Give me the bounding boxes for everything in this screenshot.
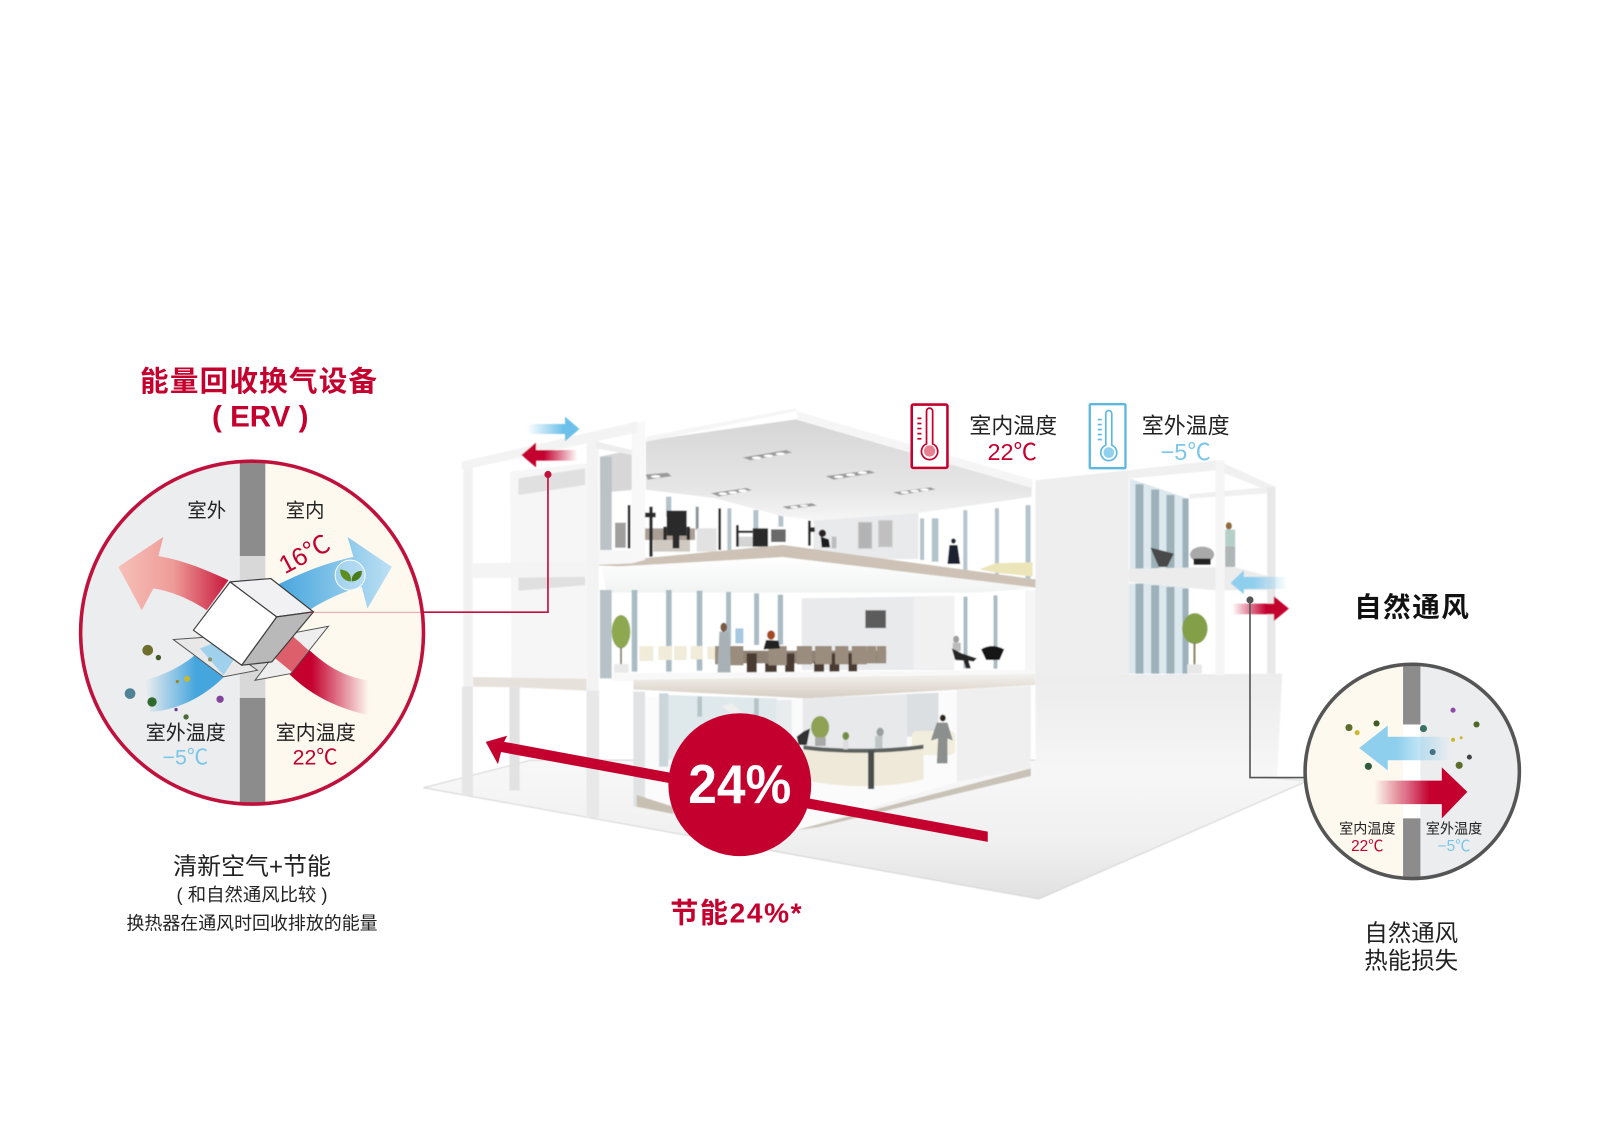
label: indoor temperature: 22℃ [1351,838,1383,855]
icon: leaf bubble [335,560,365,590]
left inner wall [510,463,587,678]
lower back wall [802,596,954,670]
lower floor background [600,593,1035,673]
label: outdoor temperature: −5℃ [1438,838,1470,855]
connector: ERV to building [306,471,551,612]
side beam [597,442,632,455]
text block: ERV benefit: 清新空气+节能 [173,853,331,880]
arrow: exhaust air to outdoor [118,537,228,610]
dust particles [125,645,224,720]
people in meeting room [717,623,780,673]
ground right wall [957,686,1031,782]
label: indoor temperature: 室内温度 [1339,821,1396,837]
title: ERV heading [140,366,378,434]
thermometer blue icon [1090,404,1125,468]
side interior ceiling [600,450,632,493]
badge: 24 percent [668,713,811,856]
side opening interior [600,450,632,550]
ceiling [646,419,1032,520]
lower glass columns [600,590,997,678]
building illustration [423,408,1308,899]
floor edge left [637,795,673,814]
balcony chairs [1150,547,1214,567]
ground wall right [907,693,938,737]
arrow: blue air in [527,417,579,441]
column rear [1267,487,1276,674]
lower floor slab face [633,674,1035,698]
right wing frame back [1129,460,1276,494]
legend: indoor temperature [969,414,1057,465]
ground glass [668,695,777,760]
circle outline [1305,664,1519,879]
ground back wall [803,694,907,750]
floor box [593,550,645,565]
label: indoor temperature: 室内温度 [276,722,356,745]
column front [1215,460,1224,675]
beam lower left [473,677,586,691]
column: inner [509,687,520,791]
title: ERV heading: ( ERV ) [212,401,308,434]
label: outdoor temperature: 室外温度 [1426,821,1482,837]
label: outdoor temperature: 室外温度 [146,722,226,745]
badge: 24 percent: 24% [688,753,791,815]
right white column [1025,590,1037,672]
seated person [819,530,836,548]
ground columns [633,692,792,807]
upper back wall [813,512,918,559]
upper glass columns [666,497,938,562]
text block: ERV benefit [126,853,378,934]
label: indoor temperature [1339,821,1396,855]
building right block [1035,460,1289,779]
arrow: red air out [521,443,577,467]
side glass [600,457,612,550]
label: outdoor: 室外 [187,500,226,522]
reception plant [811,716,849,749]
ground floor [633,686,1031,830]
legend: indoor temperature: 室内温度 [969,414,1057,439]
text block: ERV benefit: 换热器在通风时回收排放的能量 [126,914,378,934]
legend: outdoor temperature: −5℃ [1161,439,1211,465]
standing man [947,538,960,564]
text block: natural ventilation heat loss: 自然通风 [1364,920,1458,946]
title: ERV heading: 能量回收换气设备 [140,366,378,398]
ventilation grille upper [518,468,585,495]
upper fins [1130,479,1189,570]
ceiling lights [646,450,936,509]
legend: indoor temperature: 22℃ [987,439,1037,465]
ground plane [423,760,1308,899]
arrow: blue air in right [1230,570,1287,594]
label: outdoor temperature [1426,821,1482,855]
person silhouette [722,703,743,717]
lower wall right part [913,596,954,669]
office chairs and poles [645,507,815,557]
wall pictures [858,521,892,548]
lower floor [600,590,1037,698]
plinth wall [1035,674,1282,779]
arrow: indoor return air [273,634,368,715]
ground level left structure [462,677,599,818]
text block: ERV benefit: ( 和自然通风比较 ) [177,884,328,905]
arrow: outdoor air intake [145,640,230,712]
back beam [1189,486,1276,499]
text block: natural ventilation heat loss: 热能损失 [1364,947,1458,973]
text block: natural ventilation heat loss [1364,920,1458,973]
ventilation grille lower [518,570,585,591]
arrow: energy saving [486,736,988,842]
label: indoor: 室内 [286,500,324,522]
conference table and chairs [715,646,886,677]
dust particles [1345,708,1480,770]
thermometer red icon [912,405,947,468]
sofa [912,731,955,755]
lounge figure and chair [952,636,1004,668]
legend: outdoor temperature: 室外温度 [1142,414,1230,439]
office desk [645,528,753,552]
icon: exchanger flaps [173,626,328,680]
connector: natural ventilation to building [1247,597,1337,778]
upper floor interior [597,480,1034,573]
visitor walking [931,715,953,763]
water cooler [735,628,743,643]
sofa [980,562,1033,577]
lower fins [1129,584,1189,674]
ceiling edge [646,408,1033,488]
column: centre [586,691,599,818]
slab underside [602,557,1037,602]
icon: exchanger cube [193,579,313,665]
label: outdoor temperature [146,722,226,769]
upper office details [645,497,960,564]
left frame [462,417,645,815]
label: indoor temperature: 22℃ [293,745,338,769]
outer column left [463,465,473,790]
label: indoor temperature [276,722,356,769]
legend: outdoor temperature [1142,414,1230,465]
grey monitor [771,529,786,542]
arrow: warm air out [1374,767,1467,818]
column front [632,422,645,560]
roof beam [462,422,637,470]
potted plant [1182,613,1207,674]
plant [612,615,630,673]
upper floor slab [593,545,1037,588]
caption: saving 24 percent: 节能24%* [670,897,803,928]
office chair [797,728,810,745]
wall picture [865,610,886,628]
balcony person [1225,522,1235,567]
side chair [615,505,630,548]
panel: ERV circle [71,449,433,816]
circle outline [81,461,423,804]
tower wall [1035,470,1129,676]
cream chairs [639,646,717,661]
reception desk [803,745,923,789]
right end glass columns upper [963,505,1031,579]
column centre [587,440,599,815]
title: natural ventilation: 自然通风 [1354,591,1470,622]
arrow: red air out right [1232,596,1289,621]
lower floor plate [612,670,1035,681]
balcony slab [1129,567,1271,590]
floor edge right [797,768,1031,830]
receptionist [875,728,884,748]
panel: natural ventilation circle [1305,664,1520,879]
ground floor interior [633,692,957,830]
arrow: fresh air to indoor [277,537,392,612]
label: supply temperature: 16℃ [274,530,335,580]
mid beam [472,561,587,578]
ERV exchanger artwork [118,500,392,769]
column: far left [462,687,473,796]
arrow: cold air in [1359,725,1451,770]
label: outdoor temperature: −5℃ [163,745,208,769]
